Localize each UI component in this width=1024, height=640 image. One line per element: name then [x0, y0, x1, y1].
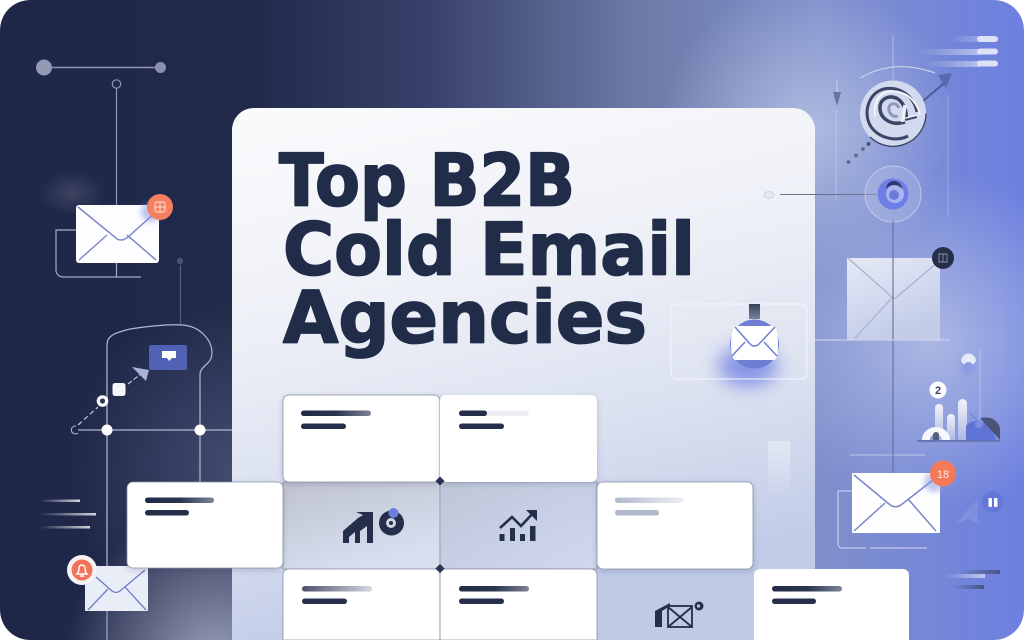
title [279, 138, 695, 360]
icon: chat chip [149, 345, 187, 370]
title: Top B2B [279, 138, 575, 222]
icon: small blue chips [957, 492, 1003, 522]
grid joint upper [436, 476, 444, 486]
mini bar chart illustration: 2 [935, 385, 941, 397]
node line top [36, 60, 166, 205]
title: Cold Email [283, 208, 695, 292]
card: row 1 column 2 [440, 395, 597, 482]
icon: envelope lower right [838, 460, 956, 548]
icon: ghost envelope [847, 247, 954, 340]
icon: at sign coin [860, 80, 926, 146]
card: row 3 column 2 [440, 569, 597, 640]
grid cell: trend chart icon [440, 482, 597, 569]
card: row 2 left [127, 482, 283, 568]
card: row 3 column 1 [283, 569, 440, 640]
menu bars top right [918, 36, 998, 67]
rounded connector [107, 325, 212, 568]
grid cell: envelope building icon [597, 569, 754, 640]
mini bar chart illustration [917, 350, 1000, 442]
card: row 2 right [597, 482, 753, 569]
left network lines [36, 60, 283, 568]
icon: envelope lower right: 18 [937, 469, 949, 481]
panel: main white card [232, 108, 815, 640]
faint bars lower right [945, 570, 1000, 589]
right network lines [780, 35, 948, 455]
arrows around at icon [833, 73, 952, 164]
faint bar on panel [768, 441, 790, 499]
small top node [177, 258, 183, 325]
vertical connector right [892, 221, 894, 473]
title: Agencies [283, 276, 647, 360]
glass card with envelope medallion [671, 304, 807, 386]
text lines left [40, 500, 96, 528]
small node on panel [764, 192, 774, 198]
connector nodes and arrow chain [71, 367, 206, 436]
icon: envelope bottom left with bell badge [67, 555, 148, 640]
card: row 3 right [754, 569, 909, 640]
horizontal connector right [815, 339, 950, 341]
icon: envelope top left [76, 194, 173, 263]
grid cell: growth icon [283, 482, 440, 569]
card: row 1 column 1 [283, 395, 440, 482]
icon: target button [865, 166, 921, 222]
grid joint lower [436, 564, 444, 573]
envelope bracket [56, 230, 141, 277]
